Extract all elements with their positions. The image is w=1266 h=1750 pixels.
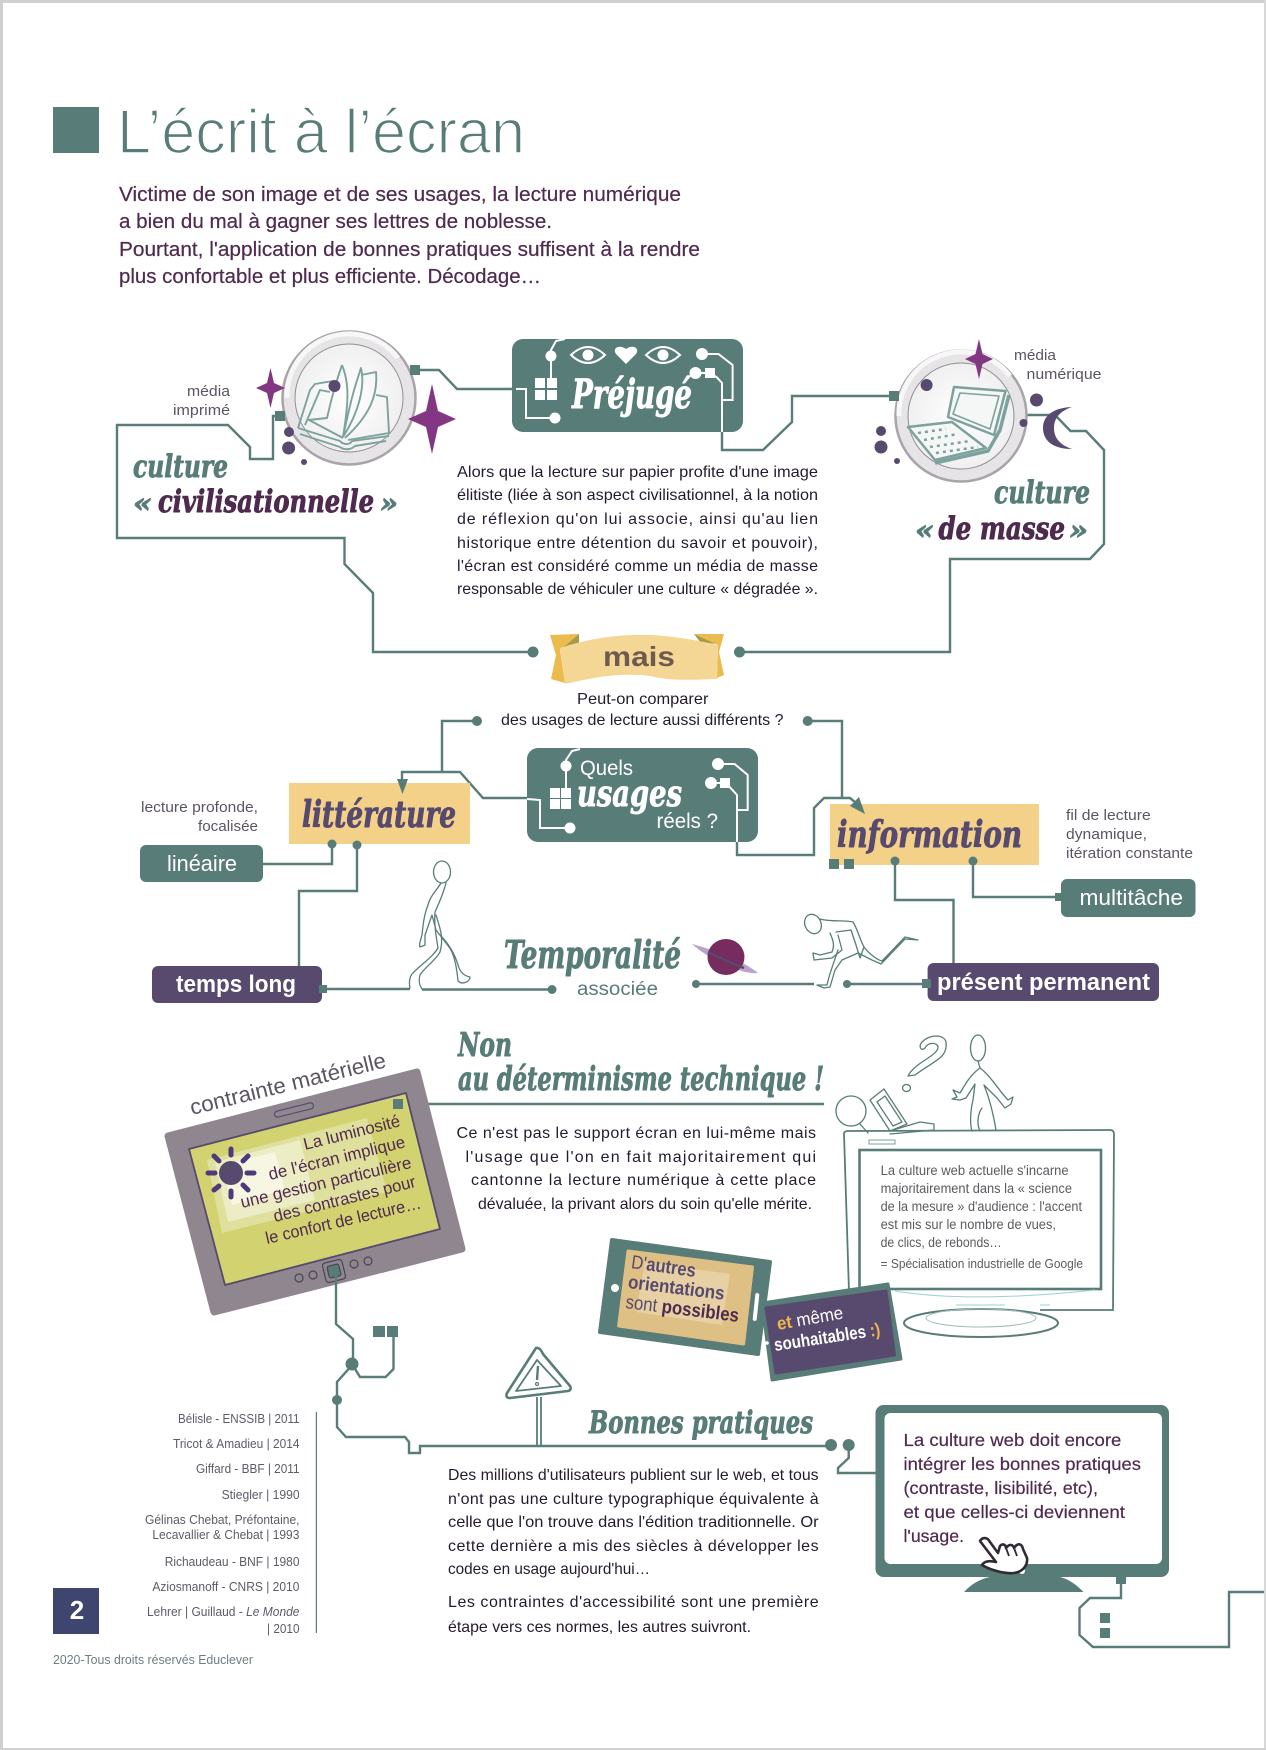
connector: bonnes pratiques to monitor: [825, 1439, 876, 1473]
heading: prejuge: Préjugé: [571, 371, 692, 418]
heading: culture de masse: de masse: [938, 511, 1065, 547]
text: web culture: est mis sur le nombre de vues,: [881, 1217, 1056, 1232]
connector: node right: [734, 646, 745, 658]
text: souhaitables: souhaitables :): [773, 1319, 881, 1355]
icon: planet: [692, 939, 758, 975]
text: luminosity note: le confort de lecture…: [264, 1194, 423, 1248]
text block: bonnes pratiques: étape vers ces normes, les autres suivront.: [448, 1619, 751, 1636]
connector: print culture to mais: [117, 416, 533, 652]
question text: des usages de lecture aussi différents ?: [501, 712, 784, 729]
connector: temporalite to present: [692, 980, 925, 988]
heading: culture civilisationnelle: [133, 449, 398, 520]
references list: Stiegler | 1990: [222, 1488, 300, 1502]
icon: outlined monitor: [844, 1130, 1114, 1337]
label: fil de lecture: [1066, 807, 1193, 862]
icon: laptop: [908, 387, 1009, 463]
heading: non au determinisme: [457, 1025, 824, 1098]
text: luminosity note: La luminosité: [301, 1111, 402, 1154]
box: information: [829, 804, 1039, 869]
banner: mais: [550, 634, 724, 684]
heading: bonnes pratiques: Bonnes pratiques: [588, 1405, 813, 1441]
label: média numérique: média: [1014, 347, 1057, 364]
text block: bonnes pratiques: Des millions d'utilisateurs publient sur le web, et tous: [448, 1467, 819, 1484]
label: média imprimé: média: [187, 383, 231, 400]
icon: circuit left: [527, 749, 580, 834]
text: good practices: et que celles-ci deviennent: [904, 1502, 1125, 1522]
heading: quels usages reels: réels ?: [656, 810, 718, 833]
icon: hand cursor: [980, 1538, 1027, 1573]
references list: Tricot & Amadieu | 2014: [173, 1437, 300, 1451]
tablet: orange: [600, 1240, 770, 1354]
arrow: information: [850, 797, 865, 814]
references list: Aziosmanoff - CNRS | 2010: [152, 1580, 299, 1594]
connector: nodes information: [890, 856, 978, 866]
panel: prejuge: [512, 339, 743, 432]
icon: running figure: [802, 912, 918, 988]
tag: lineaire: linéaire: [167, 851, 237, 876]
connector: usages to information: [737, 798, 856, 855]
connector: lens to prejuge: [415, 370, 516, 389]
heading: non au determinisme: Non: [457, 1025, 512, 1064]
connector: question to litterature: [442, 721, 477, 772]
label: contrainte materielle: contrainte matérielle: [187, 1048, 388, 1120]
text: web culture: majoritairement dans la « science: [881, 1181, 1072, 1196]
text: good practices: (contraste, lisibilité, etc),: [904, 1478, 1098, 1498]
icon: circuit left: [516, 339, 565, 424]
connector: temps long to temporalite: [327, 985, 556, 994]
icon: digital media lens: [889, 350, 1026, 482]
icon: tablet buttons: [295, 1257, 372, 1283]
icon: sun: [208, 1149, 254, 1197]
references list: Lehrer | Guillaud - Le Monde: [147, 1605, 300, 1619]
icon: star digital: [965, 339, 993, 379]
heading: temporalite: Temporalité: [504, 932, 681, 977]
banner: mais: mais: [603, 641, 675, 672]
question text: [501, 691, 784, 729]
question text: Peut-on comparer: [577, 691, 709, 708]
connector: monitor exit: [1080, 1584, 1264, 1647]
icon: print media lens: [275, 332, 420, 464]
text block: determinisme: cantonne la lecture numérique à cette place: [471, 1172, 816, 1189]
text block: prejuge: [457, 464, 818, 598]
icon: dots digital: [874, 394, 1043, 464]
connector: nodes litterature: [328, 840, 362, 850]
text block: bonnes pratiques: n'ont pas une culture typographique équivalente à: [448, 1491, 819, 1508]
text: luminosity note: [239, 1111, 423, 1248]
label: média numérique: numérique: [1026, 366, 1102, 383]
text: autres orientations: sont possibles: [624, 1292, 740, 1327]
connector: tablet to bonnes pratiques: [332, 1273, 826, 1453]
heading: culture de masse: »: [1069, 516, 1088, 546]
text: good practices: intégrer les bonnes pratiques: [904, 1454, 1141, 1474]
icon: eyes and heart: [571, 347, 680, 364]
label: lecture profonde: [141, 799, 258, 835]
label: média imprimé: imprimé: [173, 402, 230, 419]
connector: node question right: [803, 716, 813, 726]
heading: non au determinisme: au déterminisme technique !: [458, 1059, 824, 1098]
references list: Richaudeau - BNF | 1980: [165, 1555, 300, 1569]
text: souhaitables: [773, 1303, 881, 1355]
text block: bonnes pratiques: celle que l'on trouve dans l'édition traditionnelle. Or: [448, 1514, 819, 1531]
connector: lineaire: [263, 844, 332, 864]
tag: multitache: multitâche: [1080, 885, 1183, 910]
icon: open book: [298, 365, 389, 449]
icon: circuit right: [690, 348, 733, 432]
text: good practices: l'usage.: [904, 1526, 964, 1546]
connector: node: [528, 646, 538, 658]
intro text: a bien du mal à gagner ses lettres de noblesse.: [119, 211, 552, 233]
references list: | 2010: [267, 1622, 300, 1636]
label: média numérique: [1014, 347, 1102, 383]
text block: prejuge: Alors que la lecture sur papier profite d'une image: [457, 464, 818, 481]
label: fil de lecture: dynamique,: [1066, 826, 1147, 843]
heading: culture civilisationnelle: »: [380, 489, 398, 519]
text: web culture: [881, 1163, 1083, 1271]
tag: temps long: temps long: [176, 971, 296, 998]
connector: information to multitache: [973, 861, 1060, 897]
label: média imprimé: [173, 383, 231, 419]
references list: Giffard - BBF | 2011: [196, 1462, 300, 1476]
text block: bonnes pratiques: cette dernière a mis des siècles à développer les: [448, 1538, 819, 1555]
text: autres orientations: D'autres: [630, 1252, 697, 1282]
icon: dots print: [282, 427, 307, 465]
text: luminosity note: une gestion particulière: [239, 1153, 413, 1212]
text: good practices: [904, 1430, 1141, 1546]
heading: culture civilisationnelle: «: [133, 489, 152, 519]
heading: culture de masse: culture: [994, 475, 1090, 511]
label: fil de lecture: fil de lecture: [1066, 807, 1151, 824]
label: lecture profonde: focalisée: [198, 818, 258, 835]
text: web culture: La culture web actuelle s'incarne: [881, 1163, 1069, 1178]
text block: prejuge: de réflexion qu'on lui associe, ainsi qu'au lien: [457, 511, 818, 528]
text block: determinisme: dévaluée, la privant alors du soin qu'elle mérite.: [478, 1196, 812, 1213]
page number: 2: [70, 1595, 84, 1625]
heading: quels usages reels: usages: [577, 773, 682, 815]
intro text: Pourtant, l'application de bonnes pratiques suffisent à la rendre: [119, 239, 700, 261]
heading: quels usages reels: Quels: [580, 757, 633, 780]
text block: determinisme: Ce n'est pas le support écran en lui-même mais: [456, 1125, 816, 1142]
tag: temps long: [152, 966, 327, 1003]
label: lecture profonde: lecture profonde,: [141, 799, 258, 816]
references list: [145, 1412, 316, 1636]
box: information: information: [837, 814, 1022, 856]
heading: culture de masse: «: [915, 516, 934, 546]
text: autres orientations: [624, 1252, 740, 1327]
box: litterature: [289, 783, 470, 844]
text block: prejuge: l'écran est considéré comme un média de masse: [457, 558, 818, 575]
text block: determinisme: l'usage que l'on en fait majoritairement qui: [466, 1149, 816, 1166]
panel: solid monitor: [876, 1405, 1169, 1592]
text block: prejuge: historique entre détention du savoir et pouvoir),: [457, 535, 818, 552]
page number: [53, 1588, 99, 1634]
connector: heading rule: [398, 1103, 824, 1105]
label: fil de lecture: itération constante: [1066, 845, 1193, 862]
text block: prejuge: responsable de véhiculer une culture « dégradée ».: [457, 581, 818, 598]
tag: present permanent: [922, 963, 1159, 1001]
references list: Bélisle - ENSSIB | 2011: [178, 1412, 300, 1426]
text: souhaitables: et même: [775, 1303, 845, 1334]
references list: Lecavallier & Chebat | 1993: [152, 1528, 299, 1542]
connector: question to information: [808, 721, 842, 798]
icon: warning sign: [506, 1348, 571, 1446]
tag: multitache: [1055, 879, 1196, 917]
panel: material tablet: [168, 1072, 462, 1312]
text: web culture: de clics, de rebonds…: [881, 1235, 1002, 1250]
intro text: Victime de son image et de ses usages, la lecture numérique: [119, 184, 681, 206]
heading: quels usages reels: [577, 757, 718, 833]
intro text: plus confortable et plus efficiente. Décodage…: [119, 266, 541, 288]
connector: usages to litterature: [402, 772, 527, 798]
panel: quels usages: [527, 748, 758, 842]
connector: prejuge to digital lens: [722, 396, 894, 450]
box: litterature: littérature: [302, 794, 456, 836]
icon: moon: [1043, 407, 1072, 449]
icon: figure with question mark: [836, 1035, 1013, 1134]
connector: node question left: [472, 716, 482, 726]
text block: prejuge: élitiste (liée à son aspect civilisationnel, à la notion: [457, 487, 818, 504]
heading: culture civilisationnelle: culture: [133, 449, 228, 485]
text: good practices: La culture web doit encore: [904, 1430, 1121, 1450]
text: autres orientations: orientations: [627, 1272, 726, 1305]
heading: culture civilisationnelle: civilisationnelle: [158, 484, 374, 520]
label: associee: associée: [577, 979, 658, 1000]
tablet: purple: [762, 1284, 901, 1380]
text: web culture: = Spécialisation industrielle de Google: [881, 1257, 1083, 1271]
intro text: [119, 184, 700, 288]
footer: 2020-Tous droits réservés Educlever: [53, 1653, 253, 1667]
text block: bonnes pratiques: Les contraintes d'accessibilité sont une première: [448, 1594, 819, 1611]
text: luminosity note: des contrastes pour: [271, 1172, 418, 1226]
icon: walking figure: [409, 861, 470, 989]
text block: bonnes pratiques: [448, 1467, 819, 1636]
text: luminosity note: de l'écran implique: [266, 1133, 407, 1184]
icon: stars print: [256, 368, 456, 454]
icon: circuit right: [705, 758, 748, 842]
title: L’écrit à l’écran: [117, 98, 525, 167]
text block: bonnes pratiques: codes en usage aujourd'hui…: [448, 1561, 650, 1578]
heading: culture de masse: [915, 475, 1090, 547]
arrow: litterature: [397, 779, 408, 794]
text: web culture: de la mesure » d'audience : l'accent: [881, 1199, 1082, 1214]
text block: determinisme: [456, 1125, 816, 1213]
connector: digital culture to mais: [740, 415, 1104, 652]
connector: temps long: [299, 845, 357, 967]
tag: lineaire: [140, 845, 263, 882]
tag: present permanent: présent permanent: [937, 969, 1150, 996]
connector: information to present: [895, 861, 954, 965]
references list: Gélinas Chebat, Préfontaine,: [145, 1513, 300, 1527]
